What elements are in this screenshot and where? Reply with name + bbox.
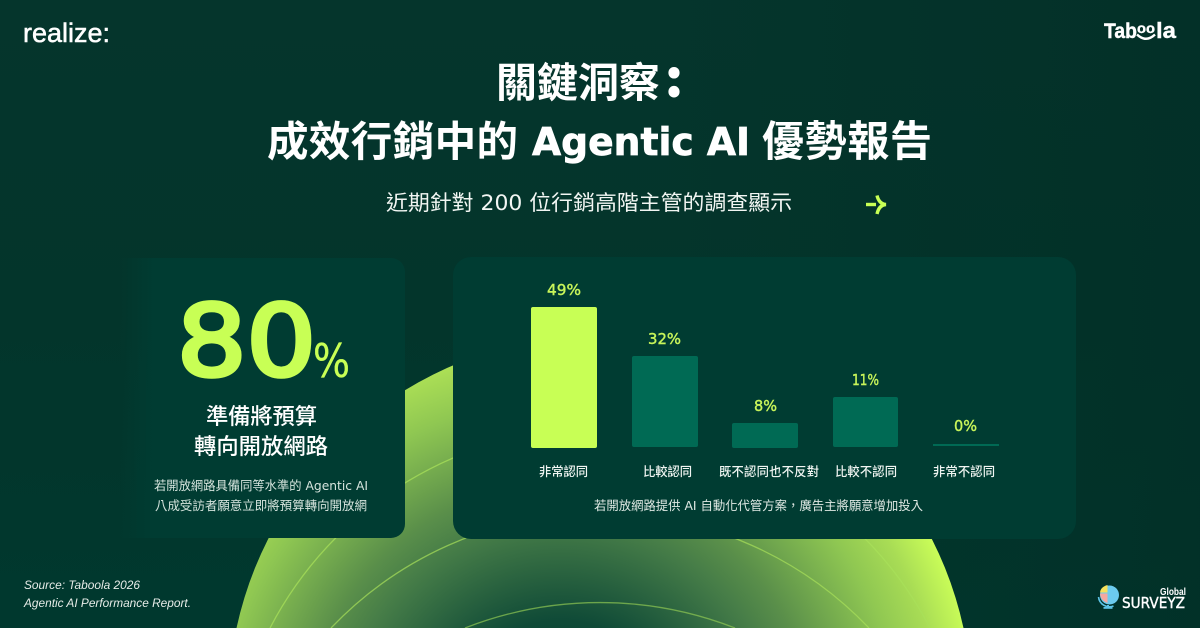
bar: 既不認同也不反對 8%: 8% bbox=[754, 397, 777, 415]
logo: Global Surveyz: Global bbox=[1160, 587, 1186, 598]
stat description: 若開放網路具備同等水準的 Agentic AI bbox=[154, 478, 368, 493]
chart caption: 若開放網路提供 AI 自動化代管方案，廣告主將願意增加投入 bbox=[594, 495, 923, 514]
panel: bar chart card bbox=[453, 257, 1076, 539]
decorative glowing circle with rings bbox=[236, 335, 964, 628]
stat heading: 轉向開放網路 bbox=[194, 429, 328, 461]
bar: 既不認同也不反對 8% bbox=[719, 397, 819, 480]
bar: 比較認同 32%: 32% bbox=[648, 330, 681, 348]
icon: arrow bbox=[866, 196, 886, 214]
bar chart bbox=[531, 281, 999, 480]
bar: 比較認同 32% bbox=[632, 330, 698, 480]
logo: Taboola: Tab bbox=[1104, 20, 1137, 43]
panel: left stat card bbox=[120, 258, 405, 538]
bar: 非常不認同 0%: 非常不認同 bbox=[933, 462, 995, 480]
source note bbox=[23, 580, 191, 610]
bar: 非常認同 49% bbox=[531, 281, 597, 480]
stat heading: 準備將預算 bbox=[206, 399, 317, 431]
stat description bbox=[154, 478, 368, 513]
logo: Taboola: la bbox=[1156, 18, 1177, 43]
icon: globe bbox=[1098, 585, 1119, 609]
subtitle: 近期針對 200 位行銷高階主管的調查顯示 bbox=[386, 191, 792, 215]
logo: Taboola bbox=[1104, 18, 1177, 43]
source note: Agentic AI Performance Report. bbox=[23, 598, 191, 610]
bar: 非常不認同 0% bbox=[933, 417, 999, 480]
title bbox=[267, 39, 932, 169]
big number: 80%: % bbox=[313, 334, 350, 388]
bar: 比較認同 32%: 比較認同 bbox=[643, 462, 692, 480]
logo: Taboola: oo bbox=[1137, 20, 1155, 36]
title: 關鍵洞察 bbox=[496, 49, 660, 109]
bar: 非常認同 49%: 非常認同 bbox=[539, 462, 588, 480]
title: 成效行銷中的 bbox=[267, 108, 518, 168]
logo: Global Surveyz bbox=[1098, 585, 1186, 612]
big number: 80%: 80 bbox=[177, 285, 316, 399]
stat heading bbox=[194, 399, 328, 461]
bar: 比較不認同 11%: 比較不認同 bbox=[835, 462, 897, 480]
title: 優勢報告 bbox=[762, 108, 932, 169]
bar: 比較不認同 11% bbox=[833, 371, 898, 480]
bar: 非常認同 49%: 49% bbox=[547, 281, 581, 299]
bar: 既不認同也不反對 8%: 既不認同也不反對 bbox=[719, 462, 819, 480]
bar: 比較不認同 11%: 11% bbox=[852, 371, 879, 389]
stat description: 八成受訪者願意立即將預算轉向開放網 bbox=[155, 498, 367, 513]
bar: 非常不認同 0%: 0% bbox=[954, 417, 977, 435]
logo: Global Surveyz: SURVEYZ bbox=[1122, 594, 1185, 612]
source note: Source: Taboola 2026 bbox=[24, 580, 141, 592]
logo: realize: realize: bbox=[23, 18, 110, 48]
title: Agentic AI bbox=[532, 120, 750, 164]
title: : bbox=[666, 39, 682, 111]
